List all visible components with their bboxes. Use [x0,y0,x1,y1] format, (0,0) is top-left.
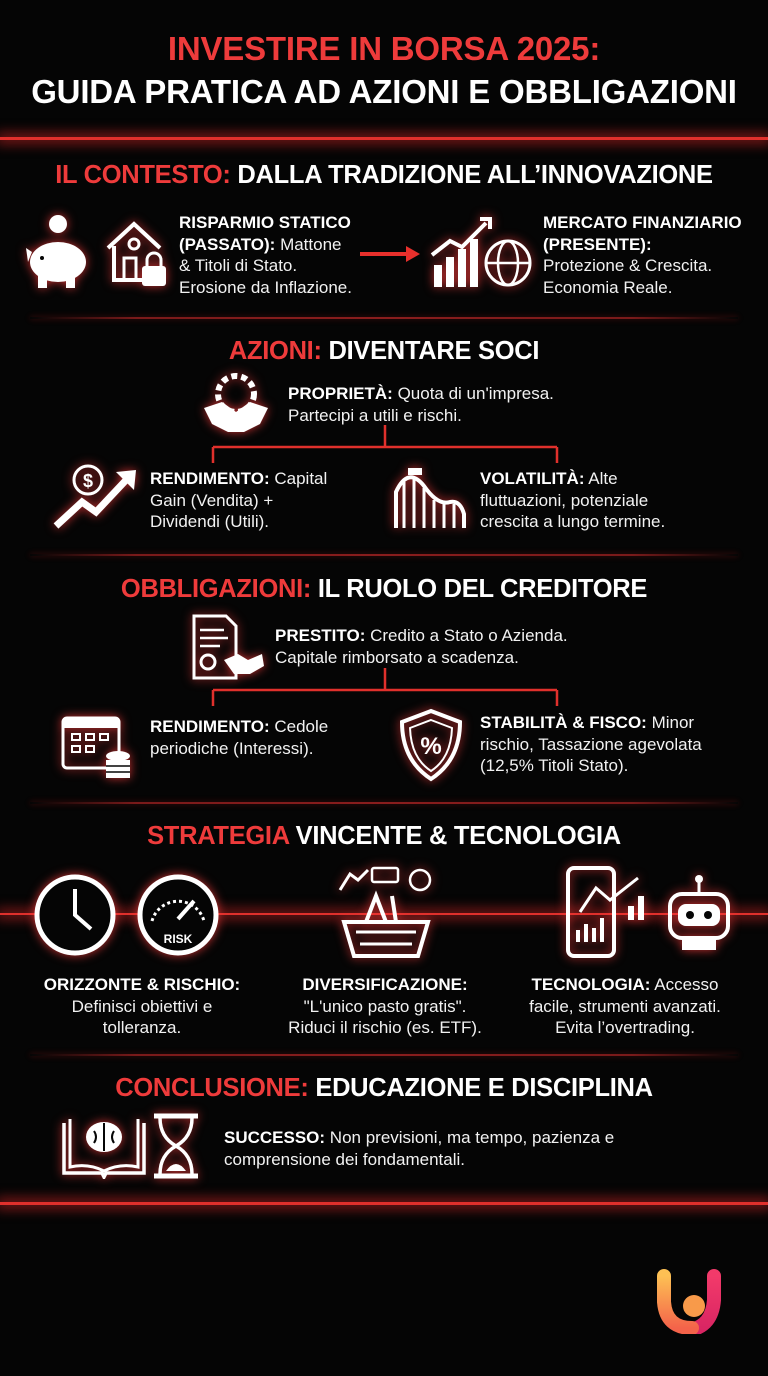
icon: phone chart and robot [558,858,738,966]
arrow [360,246,420,262]
text: diversificazione: Riduci il rischio (es. ETF). [288,1018,482,1037]
text: prestito [275,626,568,666]
text: tecnologia: TECNOLOGIA: Accesso [531,975,719,994]
text: rendimento azioni [150,469,327,531]
text: mercato finanziario: MERCATO FINANZIARIO [543,213,742,232]
icon: piggy bank [20,208,94,295]
text: stabilita fisco: rischio, Tassazione agevolata [480,734,702,754]
text: diversificazione: "L'unico pasto gratis". [304,996,466,1016]
icon: rising arrow dollar [48,458,143,534]
text: tecnologia: facile, strumenti avanzati. [529,996,721,1016]
text: diversificazione [288,975,482,1037]
text: risparmio statico: RISPARMIO STATICO [179,213,351,232]
text: prestito: PRESTITO: Credito a Stato o Azienda. [275,626,568,645]
tree connector [212,425,558,463]
heading: obbligazioni: OBBLIGAZIONI: IL RUOLO DEL CREDITORE [121,575,647,603]
text: rendimento azioni: RENDIMENTO: Capital [150,469,327,488]
text: successo: comprensione dei fondamentali. [224,1150,465,1168]
text: orizzonte: Definisci obiettivi e [72,996,212,1016]
icon: house with lock [102,216,174,294]
icon: book brain and hourglass [54,1106,204,1186]
text: orizzonte: tolleranza. [103,1018,181,1037]
text: risparmio statico: Erosione da Inflazione. [179,278,352,296]
tree connector [212,668,558,706]
icon: handshake gear [198,366,274,440]
text: prestito: Capitale rimborsato a scadenza. [275,648,519,666]
text: rendimento azioni: Gain (Vendita) + [150,490,273,510]
icon: clock [28,866,122,964]
icon: risk gauge [130,866,226,964]
icon: rollercoaster [386,460,474,534]
icon: basket [334,860,438,966]
text: tecnologia [529,975,721,1037]
text: rendimento obbligazioni: periodiche (Interessi). [150,738,313,758]
text: mercato finanziario: Protezione & Crescita. [543,256,712,275]
text: orizzonte [44,975,240,1037]
text: diversificazione: DIVERSIFICAZIONE: [302,975,468,994]
title: INVESTIRE IN BORSA 2025: [168,30,600,67]
text: mercato finanziario: Economia Reale. [543,278,672,296]
text: volatilita: crescita a lungo termine. [480,512,665,531]
text: risparmio statico [179,213,352,296]
text: rendimento obbligazioni [150,717,328,758]
text: stabilita fisco: STABILITÀ & FISCO: Minor [480,713,694,732]
title: GUIDA PRATICA AD AZIONI E OBBLIGAZIONI [31,73,737,110]
text: stabilita fisco: (12,5% Titoli Stato). [480,756,628,775]
text: volatilita: VOLATILITÀ: Alte [480,469,618,488]
heading: strategia: STRATEGIA VINCENTE & TECNOLOGIA [147,822,621,850]
text: stabilita fisco [480,713,702,775]
text: volatilita [480,469,665,531]
title [31,30,737,110]
heading: contesto: IL CONTESTO: DALLA TRADIZIONE ALL’INNOVAZIONE [55,161,713,189]
text: proprieta: PROPRIETÀ: Quota di un'impresa. [288,384,554,403]
heading: azioni: AZIONI: DIVENTARE SOCI [229,337,539,365]
text: risparmio statico: (PASSATO): Mattone [179,234,342,254]
text: tecnologia: Evita l’overtrading. [555,1018,695,1037]
icon: chart and globe [426,210,539,294]
icon: contract handshake [185,607,271,688]
text: proprieta [288,384,554,424]
text: successo [224,1128,614,1168]
text: mercato finanziario [543,213,742,296]
text: orizzonte: ORIZZONTE & RISCHIO: [44,975,240,994]
icon: risk gauge: RISK [164,932,193,946]
text: volatilita: fluttuazioni, potenziale [480,490,648,510]
text: rendimento obbligazioni: RENDIMENTO: Cedole [150,717,328,736]
icon: shield percent [392,702,470,788]
heading: conclusione: CONCLUSIONE: EDUCAZIONE E DISCIPLINA [115,1074,653,1102]
text: proprieta: Partecipi a utili e rischi. [288,406,462,424]
icon: shield percent: % [420,733,442,760]
icon: calendar coins [54,708,138,786]
text: rendimento azioni: Dividendi (Utili). [150,512,269,531]
text: successo: SUCCESSO: Non previsioni, ma tempo, pazienza e [224,1128,614,1147]
logo [657,1269,721,1334]
icon: rising arrow dollar: $ [83,471,93,491]
text: risparmio statico: & Titoli di Stato. [179,256,297,275]
text: mercato finanziario: (PRESENTE): [543,234,652,254]
